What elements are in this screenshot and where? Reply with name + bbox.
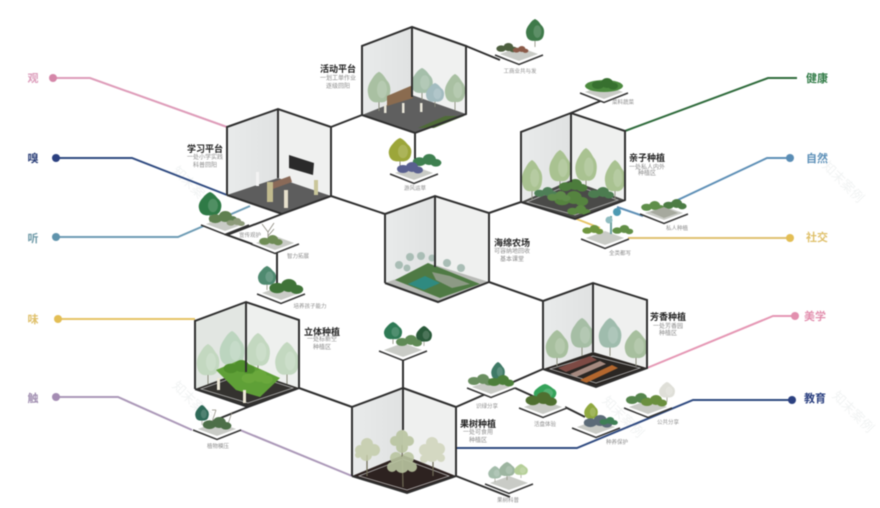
- pad: family writing: [581, 208, 633, 248]
- black connector lines: [213, 46, 603, 497]
- heading: fruit tree planting: 果树种植: [460, 418, 496, 429]
- pad: plant pressing: [193, 405, 241, 440]
- pad captions: 培养孩子能力: [293, 302, 327, 310]
- pad: conservation: [572, 403, 620, 438]
- heading: aromatic planting: 种植区: [659, 329, 677, 337]
- right value labels: 社交: [806, 230, 828, 244]
- heading: family planting: 一处私人内外: [629, 163, 665, 171]
- pad captions: [207, 67, 688, 504]
- heading: fruit tree planting: 种植区: [469, 436, 487, 444]
- heading: fruit tree planting: 一处可食用: [463, 428, 493, 436]
- right value labels: 健康: [806, 71, 828, 85]
- heading: sponge farm: 海绵农场: [494, 237, 530, 248]
- pad: live experience: [519, 384, 567, 418]
- pad: develop children's ability: [257, 266, 305, 304]
- pad captions: 智力拓展: [287, 252, 309, 260]
- heading: activity platform: [320, 63, 356, 90]
- left sense labels: 触: [28, 391, 38, 405]
- heading: learning platform: [187, 143, 223, 169]
- cube: family planting: [521, 113, 625, 219]
- heading: sponge farm: 基本课堂: [500, 255, 524, 263]
- pad captions: 私人种植: [666, 224, 688, 232]
- left sense labels: 听: [28, 231, 38, 245]
- heading: family planting: [629, 152, 665, 177]
- blue line to right label: [617, 154, 794, 216]
- heading: learning platform: 一处小学实践: [187, 153, 223, 161]
- cube: vertical planting: [195, 302, 299, 407]
- heading: family planting: 亲子种植: [629, 152, 665, 163]
- yellow line from left label: [54, 315, 195, 323]
- navy line to right label: [457, 396, 796, 448]
- watermarks: 知末案例: [819, 158, 867, 206]
- left sense labels: 嗅: [28, 151, 38, 165]
- cube: sponge farm: [385, 196, 489, 302]
- pad captions: 果树科普: [497, 496, 519, 504]
- left sense labels: 味: [28, 312, 38, 326]
- green line to right label: [625, 78, 797, 131]
- pad captions: 游风运草: [404, 184, 426, 192]
- heading: vertical planting: [304, 326, 340, 351]
- heading: family planting: 种植区: [638, 169, 656, 177]
- pad: wind meadow: [389, 138, 441, 184]
- left sense labels: [28, 72, 38, 405]
- pad: private planting: [640, 199, 688, 224]
- pad captions: 识绿分享: [476, 402, 498, 410]
- teal line from left label: [52, 206, 250, 241]
- watermarks: 知末案例: [399, 403, 447, 451]
- heading: activity platform: 活动平台: [320, 63, 356, 74]
- yellow line to right label: [574, 218, 794, 242]
- right value labels: 美学: [804, 309, 826, 323]
- pad: fruit tree education: [485, 462, 533, 494]
- pad captions: 植物模压: [207, 442, 229, 450]
- cube: fruit tree planting: [352, 388, 456, 493]
- heading: aromatic planting: 芳香种植: [650, 311, 686, 322]
- pad: industry sharing: [495, 19, 544, 64]
- pad captions: 工商业共与发: [503, 67, 537, 75]
- right value labels: [804, 71, 828, 405]
- right value labels: 教育: [804, 391, 826, 405]
- heading: aromatic planting: [650, 311, 686, 337]
- watermarks: [169, 158, 877, 451]
- heading: learning platform: 科普回阳: [193, 161, 217, 169]
- heading: activity platform: 一划工单作业: [320, 74, 356, 82]
- pink line from left label: [49, 74, 227, 127]
- cube: activity platform: [362, 27, 466, 133]
- pad: green sharing: [467, 362, 515, 398]
- pad: vegetables: [580, 78, 628, 102]
- pad captions: 宣传观护: [239, 231, 261, 239]
- pad captions: 公共分享: [657, 418, 679, 426]
- pad: nature observation: [199, 192, 249, 234]
- watermarks: 知末案例: [599, 393, 647, 441]
- pad: intelligence training: [251, 223, 299, 254]
- pad captions: 全类都写: [609, 249, 631, 257]
- pad captions: 活盘体验: [534, 420, 556, 428]
- heading: sponge farm: 可容纳地回收: [494, 247, 530, 255]
- heading: vertical planting: 立体种植: [304, 326, 340, 337]
- watermarks: 知末案例: [169, 163, 217, 211]
- pad: fruit tree top: [379, 322, 432, 360]
- heading: fruit tree planting: [460, 418, 496, 444]
- pad: public sharing: [624, 382, 675, 418]
- cube: aromatic planting: [543, 283, 647, 387]
- purple line from left label: [52, 393, 352, 476]
- pad captions: 种养保护: [606, 438, 628, 446]
- pink line to right label: [647, 312, 799, 368]
- heading: vertical planting: 一处标新空: [307, 335, 337, 343]
- heading: aromatic planting: 一处芳香园: [653, 322, 683, 330]
- right value labels: 自然: [806, 151, 828, 165]
- cube: learning platform: [227, 109, 331, 214]
- navy line from left label: [52, 154, 227, 195]
- heading: learning platform: 学习平台: [187, 143, 223, 154]
- watermarks: 知末案例: [169, 378, 217, 426]
- heading: vertical planting: 种植区: [313, 343, 331, 351]
- pad captions: 菜料蔬菜: [612, 98, 634, 106]
- heading: activity platform: 逐级回阳: [326, 82, 350, 90]
- watermarks: 知末案例: [829, 388, 877, 436]
- left sense labels: 观: [28, 72, 38, 85]
- heading: sponge farm: [494, 237, 530, 263]
